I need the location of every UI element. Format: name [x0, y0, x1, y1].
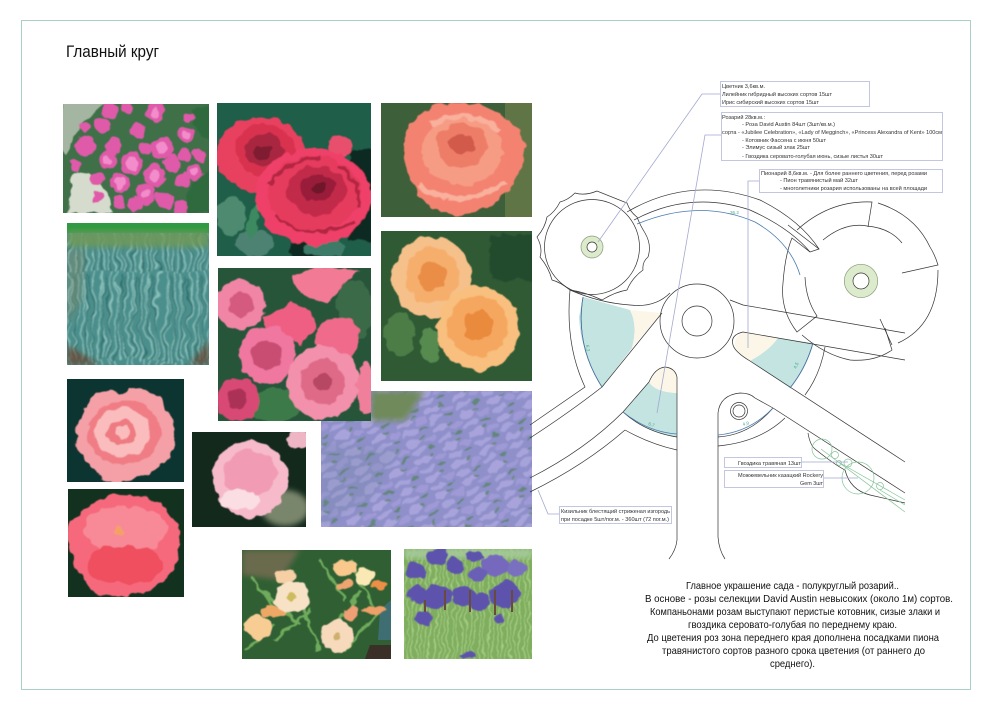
left round garden [537, 191, 649, 300]
description text: гвоздика серовато-голубая по переднему краю. [688, 619, 897, 631]
callout: rosarium: - Роза David Austin 84шт (3шт/кв.м.) [742, 122, 835, 128]
dimension labels: 4,5 [792, 361, 800, 369]
callout: peony bed: - многолетники розария использованы на всей площади [780, 185, 927, 192]
callout: catmint hedge [560, 506, 672, 524]
photo: apricot roses [381, 231, 535, 381]
title: Главный круг [66, 42, 159, 61]
photo: coral rose [381, 102, 532, 217]
bed: cream zone left [630, 310, 662, 348]
callout: dianthus: Гвоздика травяная 13шт [738, 461, 802, 467]
dimension labels: 6,3 [585, 345, 591, 352]
photo: daylilies [242, 550, 391, 659]
photo: pale pink peony [192, 430, 309, 527]
right round garden [783, 202, 938, 360]
callout: flower bed: Ирис сибирский высоких сортов 15шт [722, 99, 820, 106]
dimension labels: 36,2 [730, 210, 739, 215]
photo: pink roses [216, 266, 377, 422]
leader lines [538, 94, 858, 514]
description text: среднего). [770, 659, 815, 670]
description text: До цветения роз зона переднего края дополнена посадками пиона [647, 633, 939, 644]
callout: flower bed: Лилейник гибридный высоких сортов 15шт [722, 91, 833, 98]
description text: В основе - розы селекции David Austin невысоких (около 1м) сортов. [645, 594, 953, 605]
photo: pink peony [67, 379, 184, 482]
photo: Siberian iris [404, 549, 532, 659]
callout: flower bed [720, 82, 870, 106]
callout: juniper: Gem 3шт [800, 481, 824, 487]
callout: rosarium: - Элимус сизый злак 25шт [742, 144, 811, 151]
bed: cream zone right [735, 332, 778, 361]
callout: rosarium [722, 112, 942, 160]
rockery plantings [812, 439, 905, 512]
bed: catmint teal zone left [579, 297, 635, 387]
callout: catmint hedge: Кизильник блестящий стриженая изгородь [561, 508, 670, 515]
photo: lavender catmint [321, 391, 532, 527]
callout: dianthus [724, 458, 802, 468]
bed: cream zone bottom [649, 367, 677, 393]
photo: red David Austin rose [217, 103, 376, 259]
callout: peony bed [760, 170, 942, 192]
callout: rosarium: Розарий 28кв.м.: [722, 114, 765, 121]
dimension labels [585, 210, 800, 428]
callout: peony bed: - Пион травянистый май 32шт [780, 177, 859, 184]
description text [645, 581, 953, 670]
description text: травянистого сортов разного срока цветения (от раннего до [662, 646, 925, 657]
dimension labels: 6,7 [648, 421, 656, 428]
description text: Главное украшение сада - полукруглый розарий.. [686, 581, 899, 592]
callout: peony bed: Пионарий 8,6кв.м. - Для более раннего цветения, перед розами [761, 170, 927, 177]
garden plan [530, 190, 938, 559]
dimension labels: 4,9 [742, 420, 750, 427]
photo: blue oat grass [67, 223, 209, 365]
callout: juniper [724, 470, 824, 488]
photo: coral peony [68, 489, 184, 597]
central circle [660, 284, 734, 358]
callout: juniper: Можжевельник казацкий Rockery [738, 472, 823, 479]
callout: rosarium: сорта - «Jubilee Celebration», «Lady of Megginch», «Princess Alexandra of Kent» 100см [722, 130, 942, 136]
callout: flower bed: Цветник 3,6кв.м. [722, 84, 765, 90]
description text: Компаньонами розам выступают перистые котовник, сизые злаки и [650, 607, 940, 618]
bed: teal zone bottom [623, 382, 677, 437]
callout: rosarium: - Котовник Фассена с июня 50шт [742, 138, 827, 144]
callout: rosarium: - Гвоздика серовато-голубая июнь, сизые листья 30шт [742, 154, 884, 160]
bed: teal zone right [750, 338, 813, 388]
planting dimension arcs [581, 210, 813, 435]
photo: pink dianthus [60, 100, 212, 215]
arcs and paths [530, 190, 905, 559]
callout: catmint hedge: при посадке 5шт/пог.м. - 360шт (72 пог.м.) [561, 517, 669, 523]
